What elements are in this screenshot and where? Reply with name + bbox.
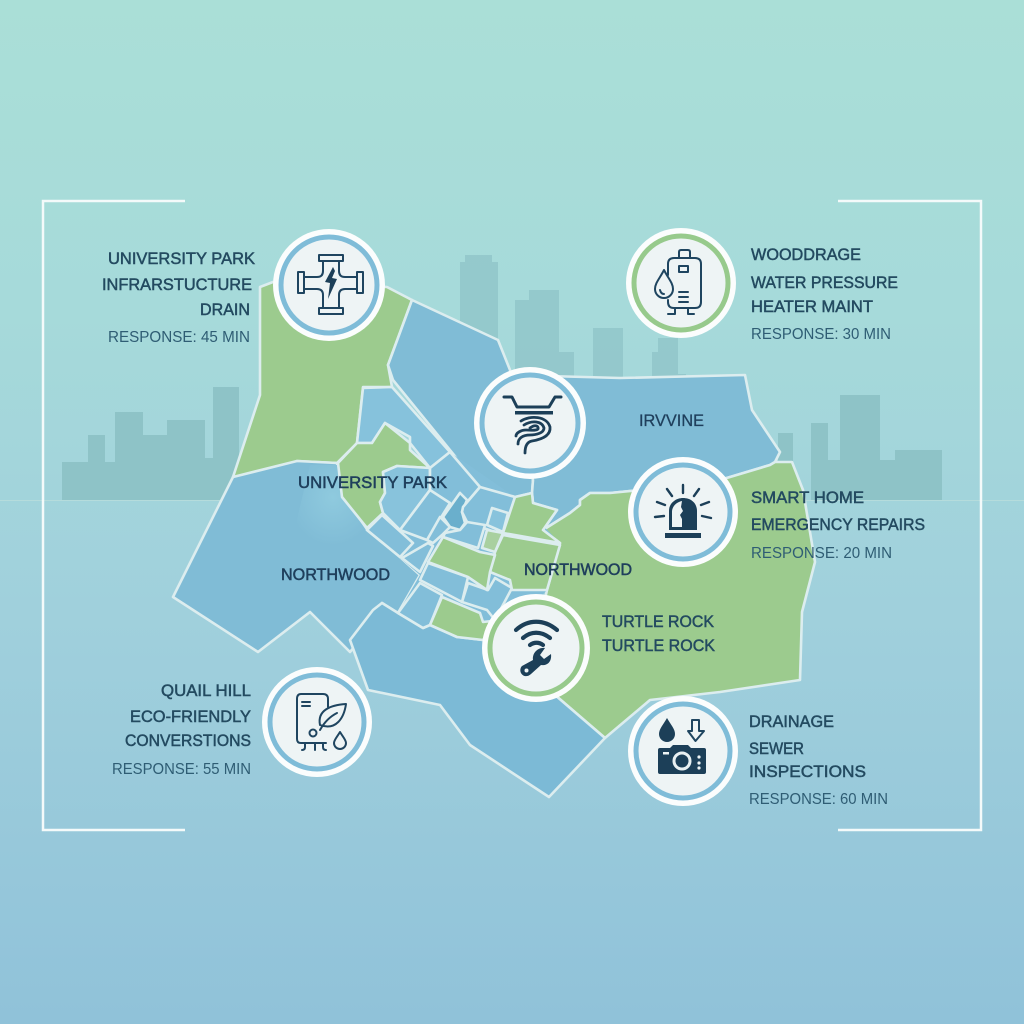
callout: Smart home: RESPONSE: 20 MIN xyxy=(751,545,892,562)
region: north blue xyxy=(388,300,533,497)
icon: emergency siren xyxy=(628,457,738,567)
cell: north inner xyxy=(357,387,450,468)
region: southwest highlight xyxy=(292,465,366,546)
callout: Drainage: SEWER xyxy=(749,739,804,758)
callout: Turtle Rock: TURTLE ROCK xyxy=(602,612,715,631)
callout: Wooddrage water pressure: HEATER MAINT xyxy=(751,297,873,316)
cell: inner blue xyxy=(380,466,430,530)
callout: Quail Hill: RESPONSE: 55 MIN xyxy=(112,761,251,778)
callout: University Park infrastructure: RESPONSE: 45 MIN xyxy=(108,329,250,346)
corner frame xyxy=(43,201,981,830)
region: northwest green xyxy=(233,282,412,477)
callout: Quail Hill: ECO-FRIENDLY xyxy=(130,707,251,726)
horizon line xyxy=(0,500,1024,501)
callout: Smart home: EMERGENCY REPAIRS xyxy=(751,515,925,534)
callout: Smart home xyxy=(751,488,925,562)
callout: Quail Hill xyxy=(112,681,251,778)
callout: Drainage: RESPONSE: 60 MIN xyxy=(749,791,888,808)
central base fill xyxy=(367,452,560,640)
callout: Wooddrage water pressure: WOODDRAGE xyxy=(751,245,861,264)
callout: University Park infrastructure xyxy=(102,249,256,346)
central cells xyxy=(367,452,515,628)
skyline xyxy=(62,255,942,500)
callout: University Park infrastructure: DRAIN xyxy=(200,300,250,319)
map label: Irvine: IRVVINE xyxy=(639,411,704,430)
icon: wifi and wrench xyxy=(482,594,590,702)
region: southwest blue xyxy=(173,461,420,652)
callout: University Park infrastructure: INFRARSTUCTURE xyxy=(102,275,252,294)
callout: Turtle Rock: TURTLE ROCK xyxy=(602,636,716,655)
region: University Park green xyxy=(338,423,430,528)
map label: Northwood west: NORTHWOOD xyxy=(281,565,390,584)
callout: Drainage xyxy=(749,712,888,808)
callout: Quail Hill: QUAIL HILL xyxy=(161,681,251,700)
callout: Drainage: DRAINAGE xyxy=(749,712,834,731)
district map xyxy=(173,282,815,797)
callout: Drainage: INSPECTIONS xyxy=(749,762,866,781)
callout: Turtle Rock xyxy=(602,612,716,655)
callout: Smart home: SMART HOME xyxy=(751,488,864,507)
region: south blue xyxy=(350,603,605,797)
map label: Northwood east: NORTHWOOD xyxy=(524,560,632,579)
icon: drain with swirl xyxy=(474,367,586,479)
icon: camera with drop and arrow xyxy=(628,696,738,806)
callout: Wooddrage water pressure: RESPONSE: 30 MIN xyxy=(751,326,891,343)
callout: Wooddrage water pressure xyxy=(751,245,898,343)
icon: water heater with drop xyxy=(626,228,736,338)
region: Irvine xyxy=(512,375,780,530)
callout: Quail Hill: CONVERSTIONS xyxy=(125,731,251,750)
icon: eco water heater with leaf xyxy=(262,667,372,777)
icon: pipe cross with crack xyxy=(273,229,385,341)
region: east green xyxy=(530,462,815,738)
map label: University Park: UNIVERSITY PARK xyxy=(298,473,448,492)
callout: University Park infrastructure: UNIVERSITY PARK xyxy=(108,249,256,268)
callout: Wooddrage water pressure: WATER PRESSURE xyxy=(751,273,898,292)
central green cells xyxy=(428,493,560,640)
